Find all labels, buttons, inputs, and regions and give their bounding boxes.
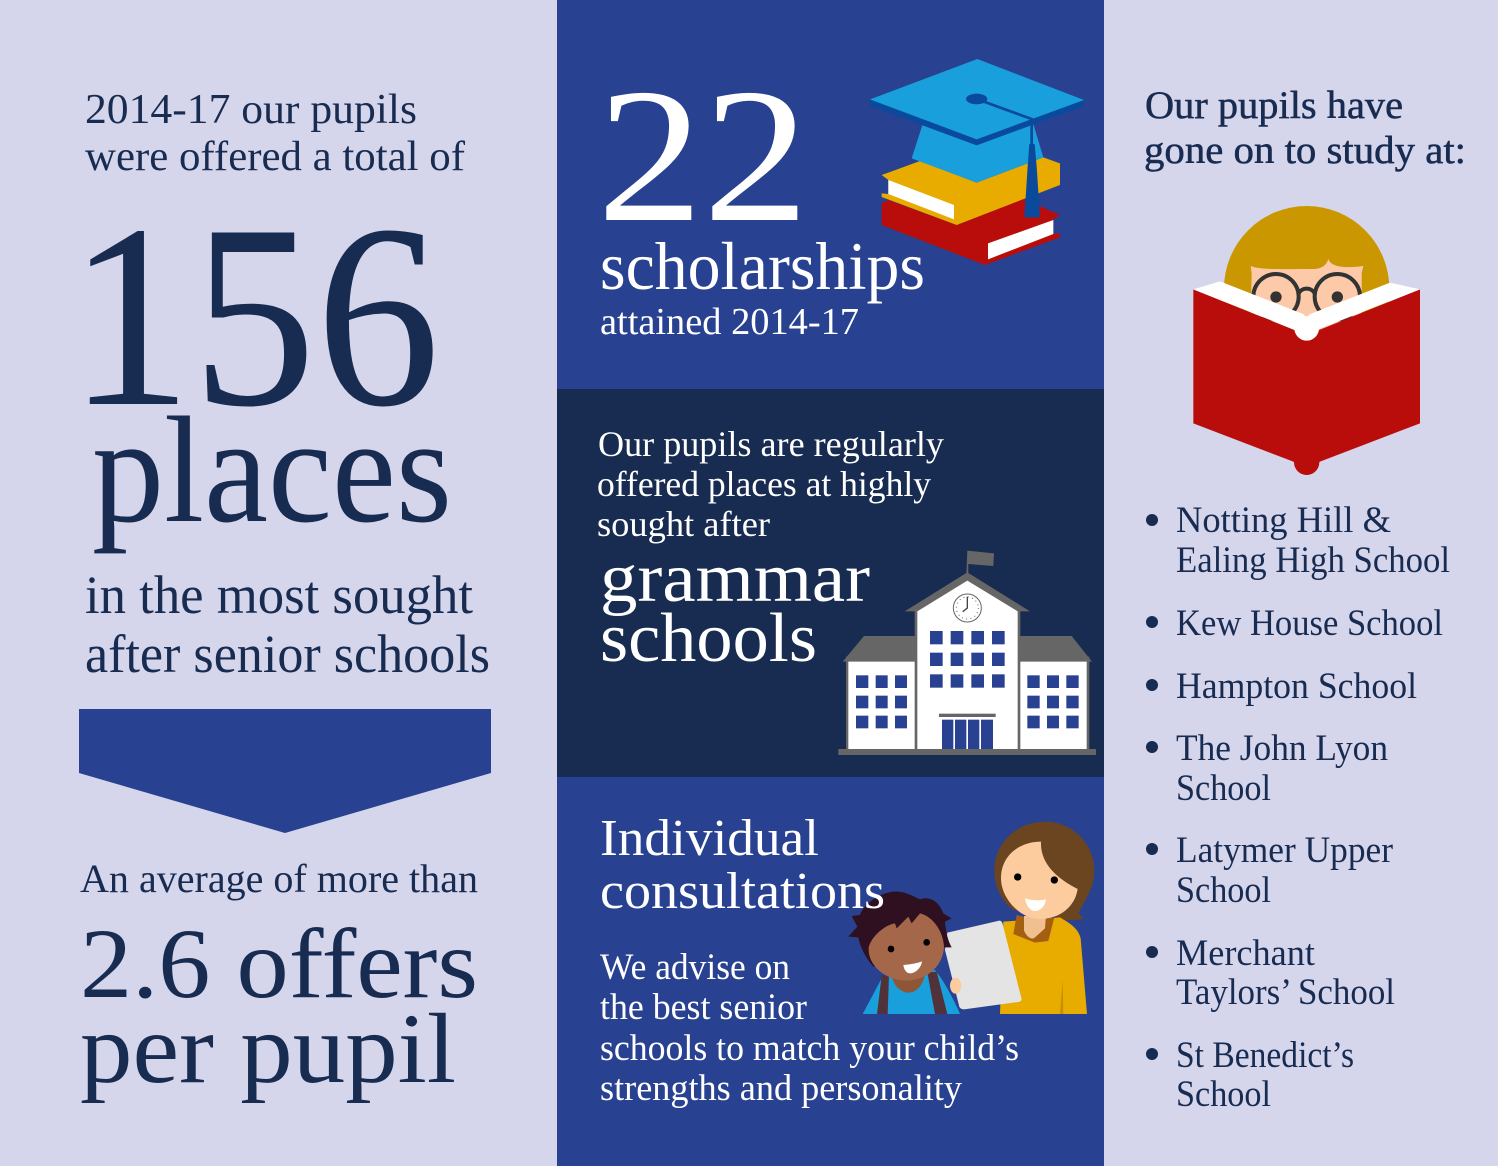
body text: the best senior [600, 987, 807, 1028]
intro text: Our pupils are regularly [598, 424, 944, 464]
list item: Merchant Taylors: Merchant [1176, 933, 1316, 974]
heading: destination schools [1144, 84, 1466, 172]
intro text: were offered a total of [85, 134, 465, 180]
paper [945, 921, 1022, 1009]
intro text: offered places at highly [597, 464, 931, 504]
heading: destination schools: Our pupils have [1145, 84, 1403, 127]
icon: graduation cap on books [870, 59, 1084, 265]
list item: Notting Hill & Ealing: Notting Hill & [1176, 500, 1391, 541]
caption: attained: attained 2014-17 [600, 301, 859, 343]
list item: St Benedict's [1146, 1035, 1354, 1115]
heading: places: places [92, 386, 452, 554]
panel: individual consultations [557, 777, 1104, 1166]
hand [950, 978, 961, 994]
list item: Latymer Upper: Latymer Upper [1176, 830, 1393, 871]
icon: school building [838, 551, 1096, 755]
list item: John Lyon: The John Lyon [1176, 728, 1388, 769]
panel: places offered [68, 87, 491, 1104]
list item: John Lyon [1146, 728, 1388, 809]
body text: strengths and personality [600, 1068, 962, 1109]
body text: schools to match your child’s [600, 1028, 1019, 1069]
intro text: sought after [597, 504, 770, 544]
list: schools [1146, 500, 1450, 1115]
intro text: 2014-17 our pupils [85, 87, 417, 133]
teacher [994, 822, 1094, 1014]
body text: We advise on [600, 947, 790, 988]
list item: Merchant Taylors: Taylors’ School [1176, 972, 1395, 1013]
list item: St Benedict's: School [1176, 1074, 1271, 1115]
subheading: after senior schools [85, 624, 490, 684]
heading: destination schools: gone on to study at: [1144, 129, 1466, 172]
list item: John Lyon: School [1176, 768, 1271, 809]
heading: grammar schools: schools [600, 600, 817, 677]
subheading [85, 565, 490, 684]
panel: scholarships [557, 0, 1104, 389]
statistic: offers per pupil [80, 908, 478, 1104]
arrow: down chevron [79, 709, 491, 833]
list item: Latymer Upper: School [1176, 870, 1271, 911]
body text [600, 947, 1019, 1109]
heading: scholarships: scholarships [600, 228, 925, 304]
list item: St Benedict's: St Benedict’s [1176, 1035, 1354, 1076]
average text: An average of more than [80, 856, 478, 901]
heading: grammar schools: grammar [600, 540, 870, 617]
pupil [848, 892, 960, 1014]
big number 156: 156 [68, 171, 440, 461]
intro text [85, 87, 465, 180]
statistic: offers per pupil: 2.6 offers [80, 908, 478, 1019]
list item: Hampton: Hampton School [1176, 666, 1417, 707]
list item: Kew House: Kew House School [1176, 603, 1443, 644]
subheading: in the most sought [85, 565, 473, 625]
panel: destination schools [1144, 84, 1466, 1115]
list item: Latymer Upper [1146, 830, 1393, 911]
icon: child reading book [1193, 206, 1420, 475]
heading: grammar schools [600, 540, 870, 677]
heading: individual consultations: consultations [600, 863, 885, 920]
heading: individual consultations: Individual [600, 810, 819, 867]
icon: teacher and pupil [848, 822, 1094, 1014]
intro text [597, 424, 944, 544]
statistic: offers per pupil: per pupil [80, 993, 456, 1104]
heading: individual consultations [600, 810, 885, 920]
big number 22: 22 [597, 49, 809, 262]
list item: Notting Hill & Ealing: Ealing High School [1176, 540, 1450, 581]
list item: Notting Hill & Ealing [1146, 500, 1450, 581]
panel: grammar schools [557, 389, 1104, 777]
list item: Merchant Taylors [1146, 933, 1395, 1013]
